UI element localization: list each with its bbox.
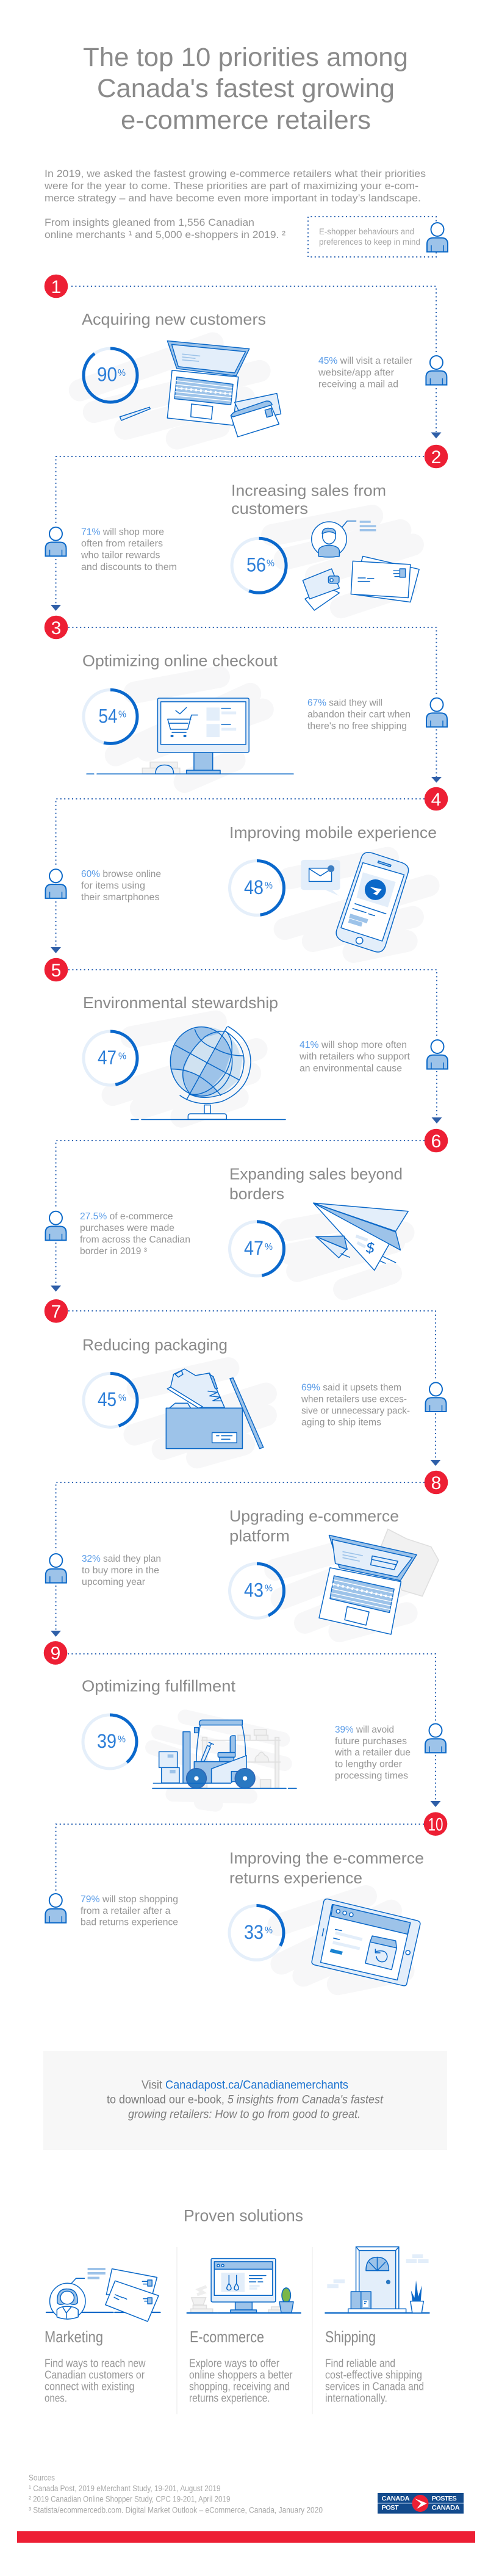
stat text: 39%: with a retailer due [334,1748,411,1758]
heading: Marketing [45,2328,103,2346]
sources: ¹ Canada Post, 2019 eMerchant Study, 19-201, August 2019 [29,2484,221,2493]
donut chart: 33%: 33 [244,1921,264,1943]
heading: Reducing packaging [82,1335,228,1354]
number badge 7 [45,1299,68,1323]
number badge 1 [45,275,68,298]
heading: Improving mobile experience [229,823,437,842]
stat text: 79%: 79% will stop shopping [81,1894,178,1905]
description: returns experience. [189,2392,270,2404]
stat text: 32% [82,1554,161,1587]
sources [29,2473,323,2514]
number badge 8: 8 [431,1473,441,1493]
description: Canadian customers or [45,2369,145,2381]
number badge 3: 3 [51,618,61,638]
panel: e-commerce [187,2259,301,2404]
illustration: monitor with shopping cart [87,677,293,782]
donut chart: 47%: % [118,1052,126,1062]
number badge 5: 5 [51,961,61,981]
icon: shopper [45,869,66,898]
description: services in Canada and [325,2380,424,2392]
illustration: marketing [46,2269,160,2322]
heading: customers [231,499,308,518]
donut chart: 47% [229,1222,284,1276]
stat text: 39% [334,1725,411,1781]
number badge 10 [424,1812,447,1836]
donut chart: 43% [229,1564,284,1618]
proven solutions heading: Proven solutions [184,2206,303,2224]
donut chart: 56%: 56 [246,554,266,576]
step 5: environmental stewardship [45,958,448,1119]
donut chart: 47%: 47 [244,1237,264,1259]
step 7: reducing packaging [45,1299,446,1457]
intro paragraph [44,168,426,204]
panel: marketing [45,2269,160,2404]
number badge 2: 2 [431,447,441,467]
description [45,2357,146,2404]
illustration: forklift in warehouse [152,1717,296,1805]
step 9: optimizing fulfillment [44,1641,446,1805]
stat text: 79% [81,1894,178,1928]
description: shopping, receiving and [189,2380,290,2392]
donut chart: 54%: % [118,710,126,720]
heading [231,482,386,518]
stat text: 39%: 39% will avoid [335,1725,394,1735]
step 1: acquiring new customers [45,275,447,439]
donut chart: 54% [84,690,137,743]
heading: borders [229,1185,284,1203]
stat text: 67% [307,698,411,731]
sources: ² 2019 Canadian Online Shopper Study, CPC 19-201, April 2019 [29,2495,230,2504]
step 2: increasing sales from customers [45,445,448,610]
illustration: customer, wallet and envelopes [272,516,419,610]
stat text: 60% [81,869,161,903]
heading: Expanding sales beyond [229,1164,403,1183]
icon: dollar sign: $ [365,1240,375,1257]
number badge 4: 4 [431,790,441,810]
stat text: 71%: 71% will shop more [81,527,164,538]
illustration: e-commerce [187,2259,301,2313]
donut chart: 43%: 43 [244,1579,264,1601]
icon: shopper [426,698,447,727]
donut chart: 45%: 45 [98,1388,117,1410]
icon: shopper [426,356,447,385]
stat text: 69%: when retailers use exces- [301,1394,407,1404]
illustration: globe [113,1022,285,1119]
sources: Sources [29,2473,55,2482]
call to action panel: to download our e-book, 5 insights from Canada's fastest [107,2094,384,2107]
stat text: 39%: to lengthy order [335,1759,402,1770]
heading: Upgrading e-commerce [229,1507,399,1525]
icon: shopper [426,1382,447,1412]
stat text: 71%: often from retailers [81,539,163,549]
stat text: 41% [299,1040,411,1073]
stat text: 27.5% [80,1211,190,1257]
icon: shopper [427,1040,448,1069]
stat text: 69%: aging to ship items [301,1417,381,1427]
stat text: 27.5%: 27.5% of e-commerce [80,1211,173,1222]
donut chart: 56% [232,538,286,593]
logo: Canada Post: POST [382,2505,399,2512]
logo: Canada Post [378,2493,464,2514]
illustration: box with shoe [135,1368,266,1457]
donut chart: 39%: 39 [97,1730,117,1752]
legend box: e-shopper behaviours: preferences to keep in mind [319,237,420,247]
step 10: improving returns experience [45,1812,447,1986]
heading [229,1849,424,1887]
donut chart: 39% [83,1715,137,1769]
logo: Canada Post: CANADA [382,2495,410,2502]
icon: shopper [45,1894,66,1923]
stat text: 67%: abandon their cart when [307,710,411,720]
illustration: smartphone and message [285,853,429,952]
legend box: e-shopper behaviours: E-shopper behaviours and [319,227,414,236]
description [325,2357,424,2404]
title: e-commerce retailers [121,106,371,135]
donut chart: 56%: % [267,558,274,569]
stat text: 67%: there's no free shipping [307,721,407,731]
heading: Environmental stewardship [83,994,278,1012]
logo: Canada Post: CANADA [432,2505,460,2512]
illustration: paper planes [289,1203,408,1289]
stat text: 71%: who tailor rewards [81,550,160,561]
stat text: 71% [81,527,177,572]
stat text: 27.5%: border in 2019 ³ [80,1246,147,1257]
icon: shopper [46,1554,66,1583]
donut chart: 45%: % [118,1393,126,1403]
column dividers [177,2247,312,2414]
number badge 8 [425,1471,448,1494]
icon: shopper [45,1211,66,1240]
description: Find reliable and [325,2357,395,2369]
donut chart: 43%: % [265,1584,273,1594]
donut chart: 47%: 47 [98,1047,117,1069]
donut chart: 33%: % [265,1925,273,1936]
description: Explore ways to offer [189,2357,279,2369]
donut chart: 48% [229,860,284,915]
stat text: 32%: to buy more in the [82,1565,159,1576]
stat text: 27.5%: purchases were made [80,1223,174,1233]
stat text: 39%: future purchases [335,1736,407,1747]
stat text: 71%: and discounts to them [81,562,177,572]
stat text: 69% [301,1382,410,1427]
description: connect with existing [45,2380,134,2392]
panel: shipping [325,2247,429,2404]
number badge 4 [425,787,448,810]
title: Canada's fastest growing [97,74,395,103]
illustration: laptop with folder [275,1529,439,1634]
title: The top 10 priorities among [83,43,408,72]
heading: Improving the e-commerce [229,1849,424,1867]
heading [229,1164,403,1203]
description: online shoppers a better [189,2369,293,2381]
donut chart: 48%: 48 [244,876,264,898]
flow connector: steps 1 to 10 [51,286,442,1892]
icon: shopper [425,1723,446,1753]
stat text: 60%: for items using [81,881,145,891]
icon: shopper [45,527,66,556]
stat text: 32%: 32% said they plan [82,1554,161,1564]
stat text: 41%: 41% will shop more often [300,1040,407,1050]
legend box: e-shopper behaviours [308,217,448,257]
heading: E-commerce [190,2328,264,2346]
step 6: expanding sales beyond borders [45,1129,448,1289]
title [83,43,408,135]
intro paragraph: merce strategy – and have become even more important in today’s landscape. [45,192,421,204]
stat text: 41%: with retailers who support [299,1052,411,1062]
description: internationally. [325,2392,387,2404]
call to action panel: growing retailers: How to go from good to great. [128,2109,361,2121]
insights text: online merchants ¹ and 5,000 e-shoppers in 2019. ² [45,229,285,240]
heading: Acquiring new customers [82,310,266,328]
number badge 6 [425,1129,448,1152]
heading: platform [229,1526,290,1545]
stat text: 69%: 69% said it upsets them [301,1382,401,1393]
heading: Increasing sales from [231,482,386,500]
stat text: 27.5%: from across the Canadian [80,1235,190,1245]
stat text: 45%: receiving a mail ad [318,379,398,389]
illustration: laptop and envelope [80,341,281,439]
heading: Optimizing fulfillment [82,1677,236,1695]
number badge 3 [45,616,68,639]
heading: Optimizing online checkout [82,651,278,669]
stat text: 67%: 67% said they will [307,698,382,709]
donut chart: 54%: 54 [99,705,117,727]
donut chart: 90%: 90 [97,364,117,386]
donut chart: 47%: % [265,1242,273,1252]
footer bar [17,2531,475,2543]
number badge 9 [44,1641,67,1665]
stat text: 45%: website/app after [318,367,394,378]
number badge 7: 7 [51,1302,61,1322]
stat text: 60%: their smartphones [81,892,160,903]
description [189,2357,293,2404]
stat text: 79%: bad returns experience [81,1918,178,1928]
stat text: 60%: 60% browse online [81,869,161,879]
number badge 6: 6 [431,1131,441,1152]
insights text: From insights gleaned from 1,556 Canadian [45,217,254,228]
stat text: 41%: an environmental cause [300,1063,402,1073]
description: cost-effective shipping [325,2369,422,2381]
donut chart: 33% [229,1905,284,1960]
step 8: upgrading e-commerce platform [46,1471,448,1634]
number badge 1: 1 [51,277,61,297]
stat text: 79%: from a retailer after a [81,1906,171,1916]
number badge 10: 10 [428,1815,443,1835]
description: ones. [45,2392,67,2404]
donut chart: 39%: % [118,1734,126,1745]
heading: returns experience [229,1869,362,1887]
insights text [45,217,285,240]
intro paragraph: were for the year to come. These priorities are part of maximizing your e-com- [44,180,418,192]
stat text: 45% [318,356,412,389]
logo: Canada Post: POSTES [432,2495,457,2502]
stat text: 45%: 45% will visit a retailer [318,356,412,366]
heading [229,1507,399,1545]
call to action panel [43,2051,447,2150]
stat text: 32%: upcoming year [82,1577,145,1587]
step 3: optimizing online checkout [45,616,447,782]
description: Find ways to reach new [45,2357,146,2369]
illustration: tablet with return box [278,1896,420,1986]
step 4: improving mobile experience [45,787,448,952]
heading: Shipping [325,2328,376,2346]
number badge 2 [425,445,448,468]
call to action panel: Visit Canadapost.ca/Canadianemerchants [142,2079,348,2091]
stat text: 39%: processing times [335,1770,408,1781]
number badge 9: 9 [51,1643,60,1664]
sources: ³ Statista/ecommercedb.com. Digital Market Outlook – eCommerce, Canada, January 2020 [29,2505,323,2514]
donut chart: 90% [84,348,137,402]
number badge 5 [45,958,68,981]
donut chart: 48%: % [265,881,273,891]
intro paragraph: In 2019, we asked the fastest growing e-commerce retailers what their priorities [45,168,426,179]
stat text: 69%: sive or unnecessary pack- [301,1405,410,1416]
donut chart: 47% [84,1031,137,1085]
donut chart: 90%: % [118,368,126,378]
illustration: shipping [325,2247,429,2313]
donut chart: 45% [84,1373,137,1427]
